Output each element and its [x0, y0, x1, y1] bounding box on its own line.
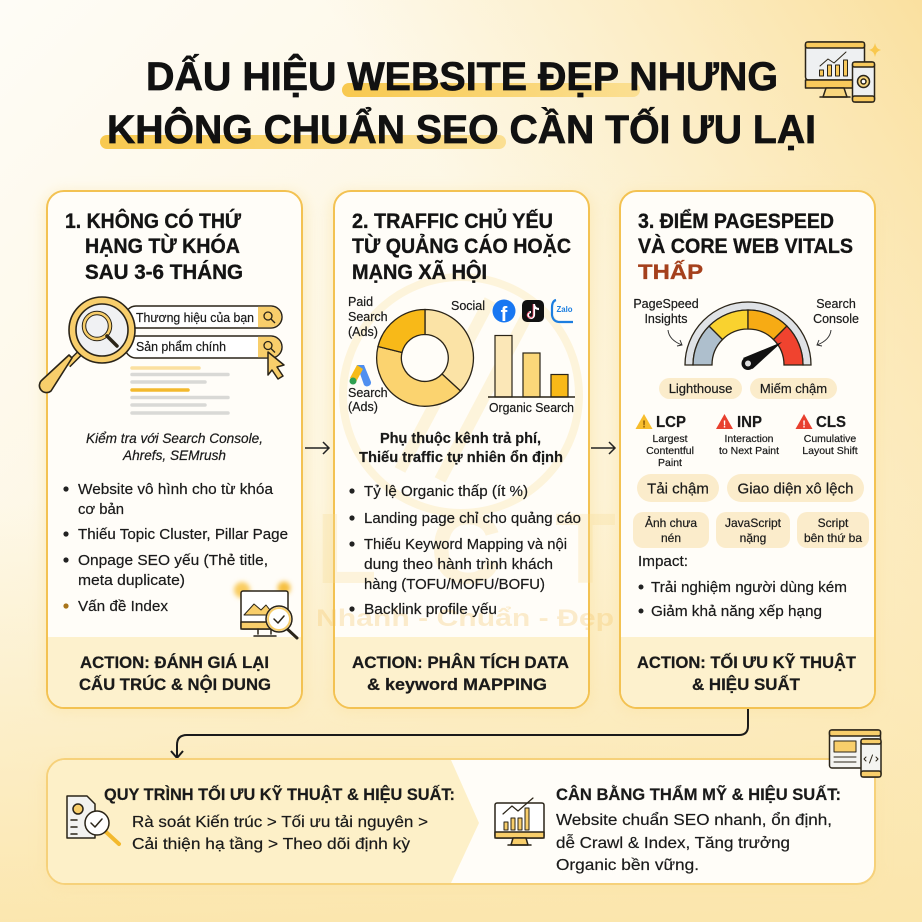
panel 2 bullets: Backlink profile yếu: [364, 601, 497, 618]
panel 1 bullets: meta duplicate): [78, 572, 185, 589]
pills: tools: [659, 378, 837, 399]
metric: CLS: !: [802, 420, 806, 430]
bar chart: [488, 336, 575, 397]
impact list: [638, 554, 847, 620]
process steps: Rà soát Kiến trúc > Tối ưu tải nguyên >: [132, 814, 428, 831]
panel 1 heading: [65, 209, 243, 284]
donut labels: Search: [348, 386, 388, 400]
panel 1 bullets: Onpage SEO yếu (Thẻ title,: [78, 552, 268, 569]
balance text: [556, 811, 832, 874]
panel 2: paid traffic dependence: [316, 191, 616, 708]
panel 2 bullets: hàng (TOFU/MOFU/BOFU): [364, 576, 545, 593]
panel 2 subheading: Thiếu traffic tự nhiên ổn định: [359, 450, 563, 466]
tools note: [86, 431, 263, 463]
panel 1 card: [47, 191, 302, 708]
bar chart label: Organic Search: [489, 401, 574, 415]
icon: magnifying glass: [39, 297, 135, 393]
metric: LCP: [636, 414, 694, 469]
panel 3 heading: THẤP: [638, 261, 703, 284]
panel 2 heading: TỪ QUẢNG CÁO HOẶC: [352, 234, 571, 258]
bottom left process band: [48, 760, 479, 883]
gauge labels: [633, 297, 859, 346]
icon: monitor growth chart: [495, 798, 544, 845]
panel 1 heading: SAU 3-6 THÁNG: [85, 261, 243, 284]
icon: document audit: [67, 796, 119, 844]
pills: tools: Lighthouse: [669, 381, 732, 396]
panel 3 action band: [621, 637, 874, 707]
search bars illustration: [125, 306, 282, 358]
panel 1 heading: HẠNG TỪ KHÓA: [85, 234, 240, 258]
metric: INP: to Next Paint: [719, 445, 779, 457]
metric: INP: !: [723, 420, 726, 430]
panel 3 action band: ACTION: TỐI ƯU KỸ THUẬT: [637, 652, 857, 672]
gauge needle: [742, 342, 782, 370]
icon: facebook: [492, 300, 516, 326]
panel 1 heading: 1. KHÔNG CÓ THỨ: [65, 209, 242, 233]
icon: tiktok: [522, 300, 544, 322]
icon: browser and phone code: [830, 730, 881, 777]
panel 2 bullets: Thiếu Keyword Mapping và nội: [364, 536, 567, 553]
panel 2 heading: MẠNG XÃ HỘI: [352, 260, 487, 284]
process heading: QUY TRÌNH TỐI ƯU KỸ THUẬT & HIỆU SUẤT:: [104, 784, 455, 804]
panel 1 action band: ACTION: ĐÁNH GIÁ LẠI: [80, 653, 269, 672]
watermark: LCT: [316, 493, 616, 605]
panel 2 bullets: Landing page chỉ cho quảng cáo: [364, 510, 581, 527]
boxes: causes: Ảnh chưa: [645, 515, 697, 530]
impact list: Trải nghiệm người dùng kém: [651, 580, 847, 596]
icon: monitor and phone with chart: [806, 42, 881, 102]
bottom panel card: [47, 759, 875, 884]
search bars illustration: Thương hiệu của bạn: [136, 310, 254, 325]
donut labels: Paid: [348, 295, 373, 309]
panel 2 action band: [335, 637, 588, 707]
balance text: Website chuẩn SEO nhanh, ổn định,: [556, 811, 832, 829]
metric: LCP: Contentful: [646, 445, 694, 457]
panel 1: no keyword ranking: [39, 191, 302, 708]
search bars illustration: Sản phẩm chính: [136, 339, 226, 354]
pills: symptoms: Giao diện xô lệch: [738, 480, 853, 498]
pills: symptoms: [637, 474, 864, 502]
gauge: [685, 302, 811, 365]
icon: cursor: [268, 352, 284, 379]
icon: zalo: Zalo: [556, 305, 573, 314]
panel 2 bullets: Tỷ lệ Organic thấp (ít %): [364, 483, 528, 500]
metric: CLS: Cumulative: [804, 433, 856, 445]
pills: tools: Miếm chậm: [760, 381, 827, 396]
panel 1 action band: CẤU TRÚC & NỘI DUNG: [79, 675, 271, 694]
pills: symptoms: Tải chậm: [647, 480, 709, 498]
panel 1 bullets: cơ bản: [78, 501, 124, 518]
metric: INP: Interaction: [724, 433, 774, 445]
panel 1 bullets: Vấn đề Index: [78, 598, 169, 615]
watermark: [316, 277, 616, 632]
metric: LCP: Largest: [652, 433, 688, 445]
impact list: Giảm khả năng xếp hạng: [651, 604, 822, 620]
metric: LCP: Paint: [658, 457, 682, 469]
icon: zalo: [552, 300, 573, 322]
metric: CLS: [796, 414, 858, 457]
title: DẤU HIỆU WEBSITE ĐẸP NHƯNG: [146, 53, 778, 99]
panel 2 card: [334, 191, 589, 708]
arrow: panel 1 to panel 2: [305, 442, 329, 454]
arrow: panel 2 to panel 3: [591, 442, 615, 454]
bottom panel: [47, 730, 881, 884]
boxes: causes: nặng: [740, 531, 766, 545]
balance text: Organic bền vững.: [556, 857, 699, 874]
gauge labels: Search: [816, 297, 856, 311]
boxes: causes: nén: [661, 531, 681, 545]
panel 3 card: [620, 191, 875, 708]
balance heading: CÂN BẰNG THẨM MỸ & HIỆU SUẤT:: [556, 784, 841, 804]
donut labels: Social: [451, 299, 485, 313]
metric: INP: [716, 414, 779, 457]
panel 3 heading: 3. ĐIỂM PAGESPEED: [638, 210, 834, 233]
impact list: Impact:: [638, 554, 688, 570]
panel 2 action band: & keyword MAPPING: [367, 675, 547, 694]
process steps: Cải thiện hạ tầng > Theo dõi định kỳ: [132, 836, 410, 853]
boxes: causes: Script: [818, 516, 849, 530]
metric: CLS: CLS: [816, 414, 846, 431]
metric: CLS: Layout Shift: [802, 445, 858, 457]
gauge labels: PageSpeed: [633, 297, 699, 311]
panel 1 bullets: Thiếu Topic Cluster, Pillar Page: [78, 526, 288, 543]
boxes: causes: [633, 512, 869, 548]
boxes: causes: bên thứ ba: [804, 531, 862, 545]
panel 2 heading: [352, 209, 571, 284]
panel 1 action band: [48, 637, 301, 707]
gauge labels: Console: [813, 312, 859, 326]
panel 3 heading: VÀ CORE WEB VITALS: [638, 235, 853, 258]
icon: image audit: [234, 582, 297, 638]
panel 2 subheading: [359, 431, 563, 466]
panel 2 subheading: Phụ thuộc kênh trả phí,: [380, 431, 541, 447]
donut chart: [377, 310, 473, 406]
metric: INP: INP: [737, 414, 762, 431]
donut labels: [348, 295, 485, 414]
boxes: causes: JavaScript: [725, 516, 782, 530]
donut labels: (Ads): [348, 400, 378, 414]
donut labels: Search: [348, 310, 388, 324]
watermark: Nhanh - Chuẩn - Đẹp: [316, 605, 614, 632]
panel 3: pagespeed and core web vitals: [620, 191, 875, 708]
gauge labels: Insights: [644, 312, 688, 326]
arrow: panel 3 to bottom panel: [171, 709, 748, 758]
icon: facebook: f: [501, 304, 508, 326]
panel 2 bullets: [349, 483, 581, 618]
process steps: [132, 814, 428, 853]
panel 3 heading: [638, 210, 853, 284]
metric: LCP: !: [642, 420, 646, 430]
panel 2 action band: ACTION: PHÂN TÍCH DATA: [352, 653, 569, 672]
title: [100, 53, 816, 152]
tools note: Kiểm tra với Search Console,: [86, 431, 263, 446]
panel 1 bullets: Website vô hình cho từ khóa: [78, 481, 274, 498]
panel 2 bullets: dung theo hành trình khách: [364, 556, 553, 573]
panel 3 action band: & HIỆU SUẤT: [692, 675, 801, 694]
icon: google ads: [350, 365, 371, 386]
tools note: Ahrefs, SEMrush: [122, 448, 226, 463]
donut labels: (Ads): [348, 325, 378, 339]
panel 2 heading: 2. TRAFFIC CHỦ YẾU: [352, 209, 553, 233]
balance text: dễ Crawl & Index, Tăng trưởng: [556, 833, 790, 852]
metric: LCP: LCP: [656, 414, 686, 431]
results lines: [132, 368, 228, 413]
title: KHÔNG CHUẨN SEO CẦN TỐI ƯU LẠI: [107, 105, 816, 152]
panel 1 bullets: [63, 481, 288, 615]
